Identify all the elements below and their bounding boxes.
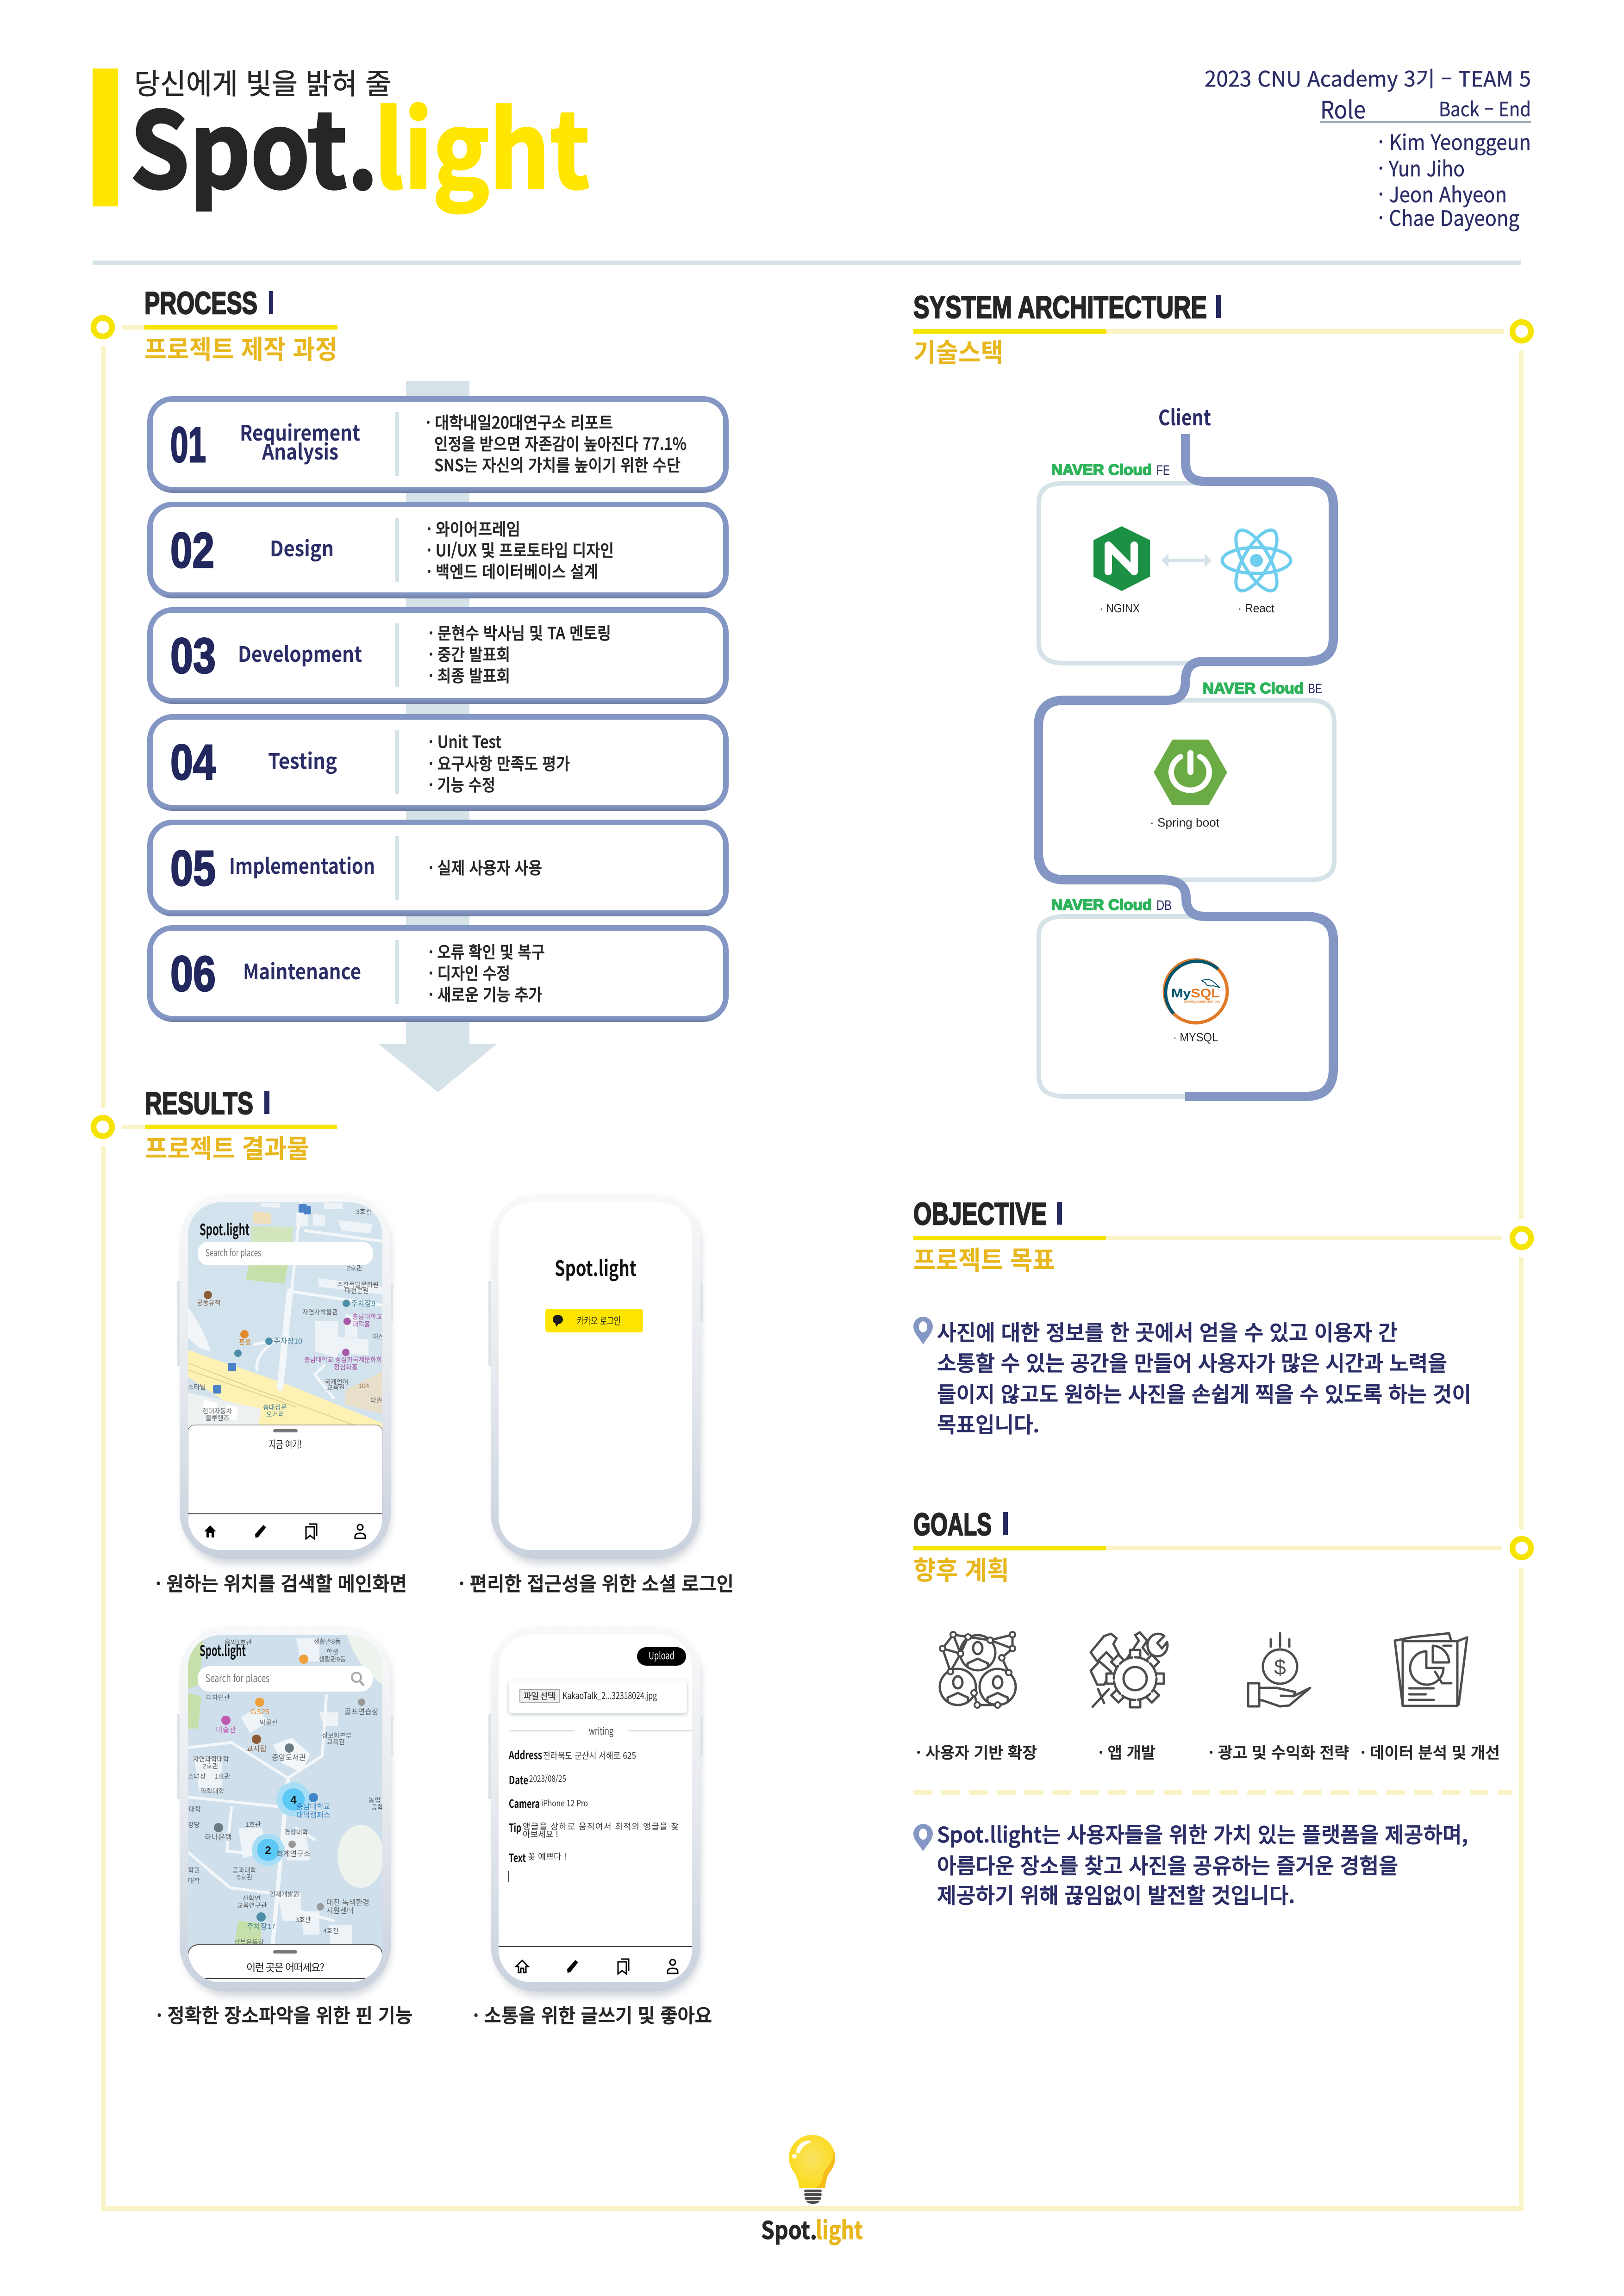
map: 충남대학교 정심화국제문화회 — [304, 1356, 382, 1363]
step 03: · 최종 발표회 — [429, 663, 510, 687]
team info: · Jeon Ahyeon — [1378, 178, 1507, 209]
form fields: Camera — [509, 1795, 540, 1811]
icon: app development — [1091, 1632, 1168, 1707]
writing divider: writing — [589, 1723, 613, 1738]
label: user base: · 사용자 기반 확장 — [916, 1740, 1037, 1763]
icon: react — [1222, 524, 1291, 615]
map pin cluster 4: 대덕캠퍼스 — [296, 1811, 331, 1819]
map: 공학 — [371, 1804, 383, 1811]
arrow: nginx react — [1162, 554, 1212, 567]
map: 생활관9동 — [319, 1655, 346, 1663]
cloud label FE: NAVER Cloud — [1051, 461, 1152, 478]
step 01 — [147, 396, 729, 493]
cloud label BE: BE — [1308, 681, 1322, 697]
step 04: Testing — [268, 745, 337, 775]
map: 5호관 — [237, 1873, 253, 1881]
nav icons — [516, 1959, 678, 1974]
title block — [93, 61, 590, 218]
step 05: 05 — [170, 840, 216, 896]
step 06: · 디자인 수정 — [429, 960, 510, 984]
heading: goals: GOALS — [913, 1507, 992, 1542]
step 04: 04 — [170, 734, 216, 790]
objective text: 사진에 대한 정보를 한 곳에서 얻을 수 있고 이용자 간 — [937, 1316, 1398, 1347]
map: 교육관 — [327, 1738, 345, 1746]
map: 음악1호관 — [225, 1639, 252, 1646]
icon: nginx — [1093, 526, 1150, 615]
phone: pin map screen — [177, 1626, 393, 1997]
map: 3호관 — [356, 1208, 372, 1215]
step 03: Development — [238, 638, 362, 668]
team info: · Yun Jiho — [1378, 152, 1465, 183]
heading: objective — [913, 1196, 1531, 1277]
map: 대전 녹색환경 — [326, 1898, 369, 1907]
map pin cluster 2 — [252, 1834, 311, 1866]
step 03: · 문현수 박사님 및 TA 멘토링 — [429, 620, 611, 644]
logotype: Spot. — [130, 67, 378, 218]
map: 중앙도서관 — [272, 1754, 306, 1762]
tagline: 당신에게 빛을 밝혀 줄 — [134, 61, 391, 102]
step 06 — [147, 925, 729, 1022]
bottom sheet: 지금 여기! — [269, 1437, 302, 1451]
step 02: Design — [270, 532, 334, 563]
file picker card — [509, 1680, 687, 1715]
map: 교육연구관 — [237, 1902, 267, 1909]
map: 훈불 — [239, 1338, 251, 1346]
form fields: Tip — [509, 1819, 521, 1835]
step 03 — [147, 607, 729, 704]
heading: process — [94, 286, 337, 367]
icon: nginx: · NGINX — [1099, 601, 1140, 615]
map: 스타빌 — [188, 1383, 206, 1391]
icon: mysql: MySQL — [1171, 986, 1220, 1000]
frame line connecting sections — [103, 346, 1521, 2209]
map: 강당 — [188, 1821, 200, 1829]
form fields: 앵글을 상하로 움직여서 최적의 앵글을 찾 — [523, 1820, 679, 1832]
app logo: Spot.light — [200, 1639, 246, 1661]
form fields: Address — [508, 1746, 542, 1762]
step 05: Implementation — [229, 850, 375, 880]
client label: Client — [1158, 401, 1211, 432]
step 01: · 대학내일20대연구소 리포트 — [426, 410, 613, 434]
step 02: · UI/UX 및 프로토타입 디자인 — [427, 537, 614, 561]
logotype: light — [374, 67, 590, 218]
map: 소녀상 — [188, 1773, 206, 1780]
step 06: · 새로운 기능 추가 — [429, 982, 542, 1006]
map: 디자인관 — [206, 1694, 230, 1701]
step 03: · 중간 발표회 — [429, 641, 510, 666]
step 01: 01 — [170, 417, 206, 473]
map: 학생 — [326, 1648, 338, 1655]
label: app development: · 앱 개발 — [1099, 1740, 1156, 1763]
map: 오거리 — [266, 1411, 284, 1418]
heading: goals — [913, 1507, 1531, 1587]
form fields: 전라북도 군산시 서해로 625 — [543, 1749, 636, 1761]
file picker card: 파일 선택 — [524, 1689, 556, 1702]
map: 대학 — [188, 1877, 200, 1885]
map pin cluster 4: 충남대학교 — [296, 1803, 331, 1811]
icon: light bulb — [789, 2135, 835, 2204]
step 06: · 오류 확인 및 복구 — [429, 939, 545, 963]
map: 자연과학대학 — [193, 1755, 229, 1763]
icon: react: · React — [1238, 601, 1275, 615]
heading: system architecture: SYSTEM ARCHITECTURE — [913, 290, 1207, 325]
bottom sheet — [188, 1425, 382, 1555]
step 05: · 실제 사용자 사용 — [429, 855, 542, 879]
heading: system architecture — [913, 290, 1531, 370]
form fields: 꽃 예쁘다 ! — [528, 1850, 567, 1862]
step 04: · Unit Test — [429, 729, 501, 753]
objective text — [913, 1316, 1471, 1439]
form fields: iPhone 12 Pro — [541, 1797, 588, 1809]
map: 교육원 — [327, 1384, 345, 1391]
map: 박물관 — [260, 1719, 278, 1726]
caption: login: · 편리한 접근성을 위한 소셜 로그인 — [459, 1568, 734, 1597]
search box: Search for places — [206, 1245, 261, 1259]
bottom sheet — [188, 1945, 382, 1986]
map: 산학연 — [243, 1895, 261, 1902]
phone: main screen — [177, 1194, 393, 1564]
panel: architecture diagram — [1038, 401, 1334, 1096]
goals text: 아름다운 장소를 찾고 사진을 공유하는 즐거운 경험을 — [937, 1849, 1398, 1880]
step 02: · 와이어프레임 — [427, 516, 520, 540]
step 02 — [147, 502, 729, 598]
heading: system architecture: 기술스택 — [913, 332, 1003, 370]
cloud label DB: NAVER Cloud — [1051, 896, 1152, 913]
file picker card: KakaoTalk_2...32318024.jpg — [562, 1688, 657, 1702]
heading: process: 프로젝트 제작 과정 — [144, 329, 337, 367]
map: 2호관 — [347, 1264, 362, 1272]
app logo: Spot.light — [200, 1217, 250, 1240]
team info: Back – End — [1439, 94, 1531, 122]
heading: objective: 프로젝트 목표 — [913, 1240, 1055, 1277]
team info: Role — [1320, 91, 1366, 125]
map: 3호관 — [295, 1916, 311, 1923]
map: GS25 — [250, 1708, 269, 1716]
map pin cluster 2: 2 — [265, 1844, 271, 1857]
bottom sheet: 이런 곳은 어떠세요? — [246, 1960, 325, 1974]
map: 1호관 — [215, 1773, 231, 1780]
step 01: Analysis — [262, 436, 338, 466]
icon: mysql — [1164, 960, 1227, 1044]
goals text: Spot.llight는 사용자들을 위한 가치 있는 플랫폼을 제공하며, — [937, 1818, 1468, 1849]
search box — [198, 1666, 373, 1692]
icon: mysql: · MYSQL — [1173, 1030, 1218, 1044]
map: 충대정문 — [263, 1404, 287, 1411]
footer logo — [761, 2135, 863, 2246]
heading: process: PROCESS — [144, 286, 257, 321]
map: 경상대학 — [284, 1829, 308, 1836]
team info — [1205, 62, 1531, 232]
cloud label BE: NAVER Cloud — [1203, 680, 1304, 697]
map: 농업 — [369, 1797, 381, 1804]
map pin cluster 4: 4 — [290, 1794, 297, 1806]
step 06: 06 — [170, 946, 216, 1002]
footer logo: light — [816, 2211, 863, 2246]
kakao login button: 카카오 로그인 — [577, 1313, 621, 1328]
goals text: 제공하기 위해 끊임없이 발전할 것입니다. — [937, 1879, 1295, 1910]
form fields: Text — [509, 1849, 526, 1865]
form fields: Date — [509, 1771, 528, 1787]
cloud label FE: FE — [1156, 463, 1170, 478]
phone: login screen — [488, 1194, 703, 1564]
map: 인재개발원 — [269, 1891, 299, 1898]
map: 현대자동차 — [202, 1407, 232, 1415]
map: 주한독일문화원 — [337, 1281, 379, 1288]
map: 104 — [358, 1382, 369, 1389]
map: 약학대학 — [200, 1787, 225, 1795]
panel: process steps — [147, 396, 729, 1022]
heading: results: 프로젝트 결과물 — [145, 1128, 309, 1166]
map: 자연사박물관 — [302, 1308, 338, 1316]
logotype — [130, 67, 590, 218]
objective text: 소통할 수 있는 공간을 만들어 사용자가 많은 시간과 노력을 — [937, 1347, 1447, 1377]
upload button: Upload — [649, 1648, 675, 1662]
step 05 — [147, 820, 729, 916]
map — [188, 1635, 384, 1950]
map: 하나은행 — [205, 1833, 232, 1842]
map — [188, 1202, 384, 1436]
map: 2호관 — [203, 1762, 219, 1770]
kakao login button — [545, 1309, 643, 1332]
phone: writing screen — [488, 1626, 703, 1997]
map: 생활관8동 — [313, 1638, 341, 1645]
heading: objective: OBJECTIVE — [913, 1196, 1047, 1232]
cloud label DB: DB — [1156, 898, 1172, 913]
map: 남부운동장 — [234, 1939, 264, 1946]
objective text: 들이지 않고도 원하는 사진을 손쉽게 찍을 수 있도록 하는 것이 — [937, 1378, 1471, 1408]
map: 대학 — [189, 1805, 201, 1813]
step 01: Requirement — [240, 417, 360, 447]
map pin cluster 4 — [276, 1782, 331, 1819]
heading: results — [94, 1086, 337, 1166]
map: 교시탑 — [246, 1745, 267, 1753]
icon: mysql: Developement Services — [1184, 999, 1220, 1004]
logotype: Spot. — [761, 2211, 817, 2246]
objective text: 목표입니다. — [937, 1408, 1039, 1439]
map: 대덕홀 — [352, 1320, 370, 1328]
app logo: Spot.light — [555, 1252, 637, 1282]
map: 충남대학교 — [352, 1313, 382, 1320]
map: 다솔 — [370, 1397, 382, 1404]
upload button — [637, 1647, 686, 1666]
map: 궁동유적 — [197, 1299, 221, 1307]
form fields: 2023/08/25 — [529, 1772, 566, 1785]
step 04: · 기능 수정 — [429, 772, 495, 796]
server boxes — [1039, 483, 1334, 1096]
step 04: · 요구사항 만족도 평가 — [429, 751, 570, 775]
caption: pin feature: · 정확한 장소파악을 위한 핀 기능 — [156, 2000, 412, 2028]
icon: spring boot — [1150, 742, 1224, 829]
map: 주차장9 — [351, 1300, 375, 1308]
team info: · Chae Dayeong — [1378, 202, 1519, 232]
map: 1호관 — [245, 1821, 261, 1828]
label: monetization: · 광고 및 수익화 전략 — [1209, 1740, 1349, 1763]
map: 블루핸즈 — [206, 1414, 230, 1422]
team info: · Kim Yeonggeun — [1378, 126, 1531, 156]
caption: writing: · 소통을 위한 글쓰기 및 좋아요 — [473, 2000, 712, 2028]
search box — [198, 1242, 373, 1265]
icon: location pin — [913, 1317, 933, 1344]
map pin cluster 2: 회계연구소 — [276, 1850, 311, 1858]
map: 대전 — [372, 1333, 384, 1340]
step 02: 02 — [170, 522, 214, 578]
map: 4호관 — [323, 1927, 339, 1935]
step 03: 03 — [170, 628, 216, 684]
step 04 — [147, 714, 729, 811]
icon: data analysis — [1395, 1633, 1467, 1706]
goals text — [913, 1818, 1468, 1910]
map: 정심화홀 — [334, 1363, 358, 1371]
heading: results: RESULTS — [145, 1086, 253, 1121]
form fields: 아보세요 ! — [523, 1828, 558, 1840]
map: 지원센터 — [326, 1907, 354, 1915]
map: 국제언어 — [325, 1378, 349, 1386]
map: 대전분원 — [345, 1287, 369, 1294]
nav icons — [204, 1524, 365, 1539]
icon: location pin — [913, 1824, 933, 1851]
icon: monetization: $ — [1274, 1655, 1286, 1679]
map: 학원 — [188, 1867, 200, 1874]
map: 주차장17 — [247, 1923, 275, 1931]
team info: 2023 CNU Academy 3기 – TEAM 5 — [1205, 62, 1531, 93]
icon: spring boot: · Spring boot — [1150, 815, 1220, 829]
connector path — [1038, 434, 1333, 1096]
map: 공과대학 — [232, 1867, 256, 1874]
step 01: SNS는 자신의 가치를 높이기 위한 수단 — [434, 452, 681, 476]
search box: Search for places — [206, 1670, 269, 1685]
icon: monetization — [1248, 1633, 1310, 1706]
icon: user base — [940, 1632, 1016, 1708]
heading: goals: 향후 계획 — [913, 1550, 1009, 1587]
caption: main screen: · 원하는 위치를 검색할 메인화면 — [156, 1568, 407, 1597]
map: 골프연습장 — [344, 1708, 379, 1716]
map: 미술관 — [216, 1726, 236, 1734]
label: data analysis: · 데이터 분석 및 개선 — [1361, 1740, 1500, 1763]
map: 정보화본부 — [322, 1732, 352, 1739]
step 02: · 백엔드 데이터베이스 설계 — [427, 559, 598, 583]
map: 주차장10 — [274, 1337, 302, 1345]
step 06: Maintenance — [243, 955, 361, 986]
arrow: process flow — [379, 381, 497, 1092]
form fields — [508, 1746, 679, 1882]
step 01: 인정을 받으면 자존감이 높아진다 77.1% — [434, 431, 687, 455]
